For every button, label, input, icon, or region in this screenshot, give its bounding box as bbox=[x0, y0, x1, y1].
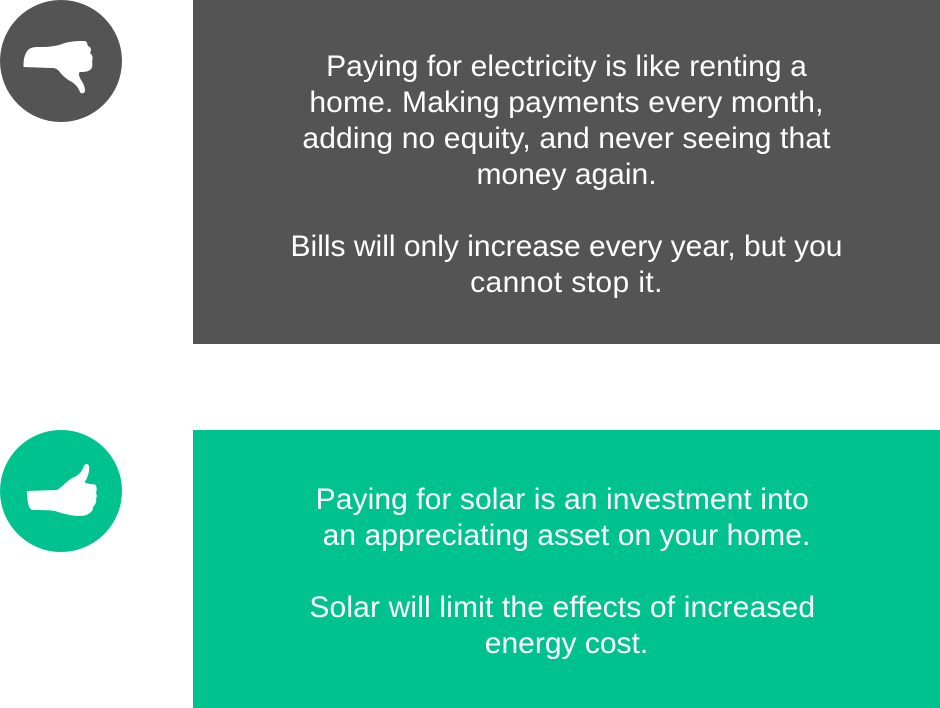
text: electricity description: Bills will only increase every year, but you bbox=[291, 230, 842, 263]
text: electricity description bbox=[291, 50, 842, 299]
text: solar description: energy cost. bbox=[485, 627, 648, 660]
text: electricity description: cannot stop it. bbox=[470, 266, 663, 299]
icon: thumbs down bbox=[0, 0, 122, 122]
text: electricity description: home. Making payments every month, bbox=[309, 86, 824, 119]
text: solar description: Paying for solar is an investment into bbox=[316, 483, 809, 516]
text: electricity description: money again. bbox=[476, 158, 657, 191]
text: solar description bbox=[309, 483, 815, 660]
panel: solar bbox=[193, 430, 940, 708]
text: solar description: Solar will limit the effects of increased bbox=[309, 591, 815, 624]
text: electricity description: adding no equity, and never seeing that bbox=[302, 122, 831, 155]
panel: electricity bbox=[193, 0, 940, 344]
text: electricity description: Paying for electricity is like renting a bbox=[326, 50, 807, 83]
text: solar description: an appreciating asset on your home. bbox=[323, 519, 810, 552]
icon: thumbs up bbox=[0, 430, 122, 552]
